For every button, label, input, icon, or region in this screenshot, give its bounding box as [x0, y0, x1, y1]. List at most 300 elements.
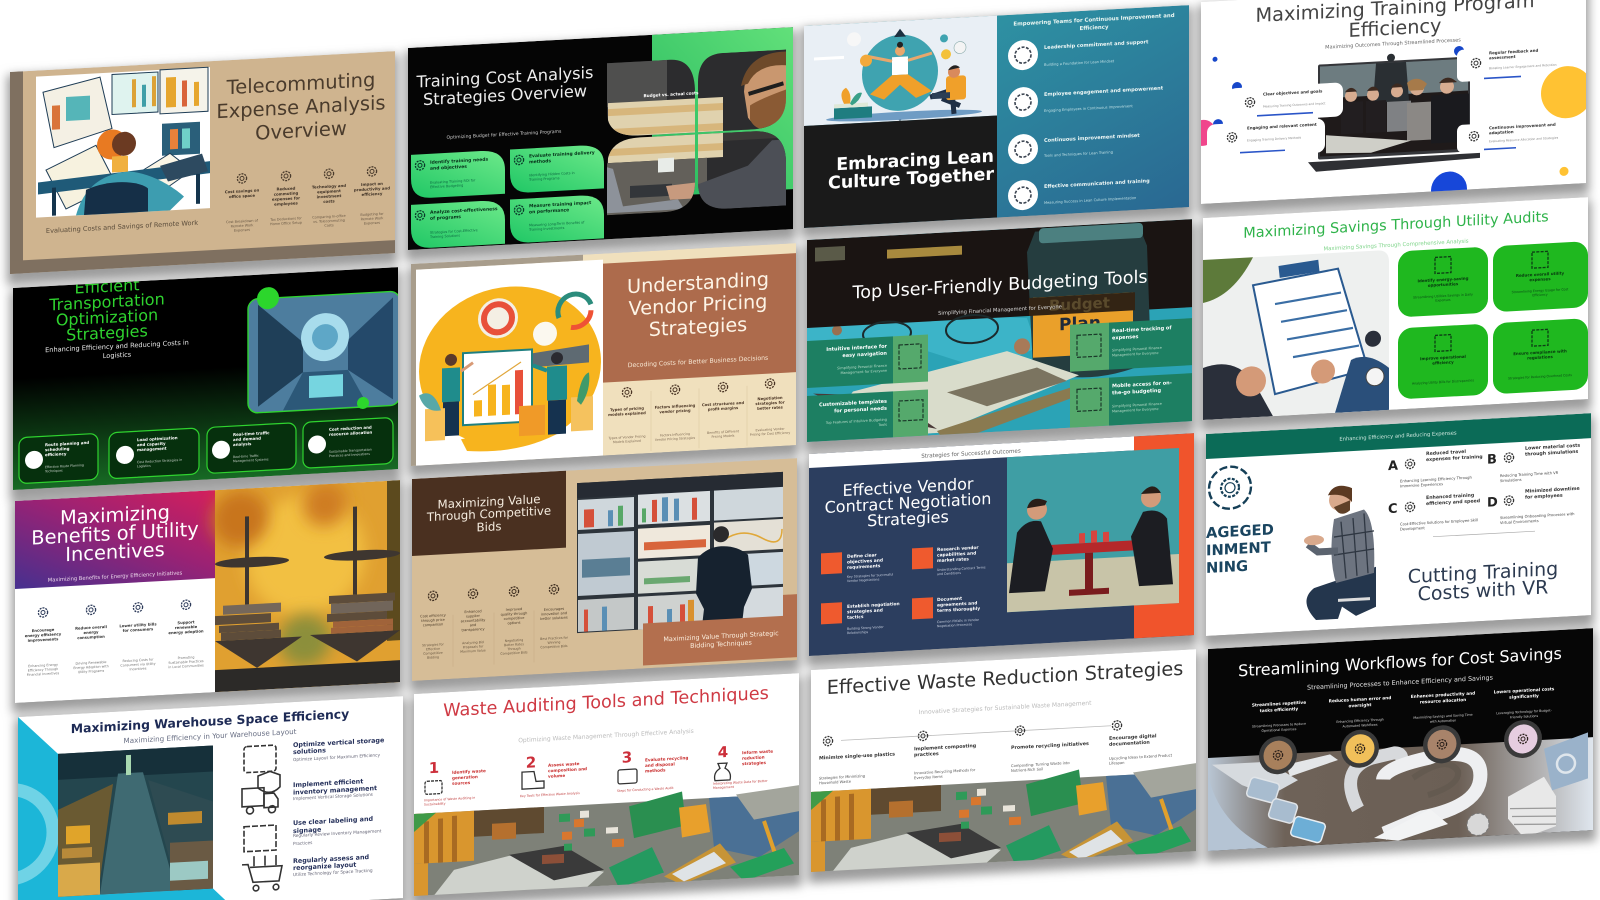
timeline with four strategies: Innovative Recycling Methods for: [914, 768, 976, 775]
slide: Maximizing Warehouse Space Efficiency: Regularly assess and: [293, 853, 370, 865]
four bordered items: [19, 417, 393, 484]
four benefit columns: energy efficiency: [25, 631, 62, 638]
caption bar: [643, 615, 797, 665]
four list rows: Effective communication and training: [1044, 178, 1150, 190]
four numbered steps: and disposal: [645, 761, 675, 768]
four green boxes: Analyze cost-effectiveness: [430, 206, 498, 216]
four benefit columns: consumption: [77, 634, 105, 640]
four green boxes: Identify training needs: [430, 157, 488, 166]
photo: hands with clipboard: [1203, 250, 1389, 420]
four icons and labels: profit margins: [708, 405, 739, 412]
title: Optimization: [56, 305, 158, 330]
slide: Maximizing Warehouse Space Efficiency: Regularly Review Inventory Management: [293, 828, 382, 839]
four green overlay boxes: Intuitive interface for: [826, 344, 888, 353]
four green boxes: [411, 144, 604, 249]
gradient title panel: [15, 490, 215, 589]
four green boxes: Measuring Long-Term Benefits of: [529, 220, 585, 227]
four numbered steps: Assess waste: [548, 761, 580, 768]
icon row and labels: Home Office Setup: [270, 221, 302, 226]
timeline with four strategies: Upcycling Ideas to Extend Product: [1109, 753, 1173, 761]
four numbered steps: Interpreting Waste Data for Better: [713, 779, 768, 786]
slide: Training Cost Analysis Strategies Overview: [408, 27, 793, 250]
four numbered steps: volume: [548, 773, 565, 779]
title: Transportation: [48, 289, 165, 315]
photo: jar, glasses and notepad on table: [807, 219, 1192, 452]
four columns: oversight: [1349, 702, 1371, 709]
icon: gear ring: [1209, 466, 1251, 510]
slide: Efficient Transportation Optimization Strategies: Cost Reduction Strategies in: [137, 458, 182, 464]
four list rows: Tools and Techniques for Lean Training: [1043, 150, 1113, 158]
timeline with four strategies: [819, 718, 1173, 785]
four list rows: Building a Foundation for Lean Mindset: [1044, 59, 1115, 67]
dark brown title panel: [412, 471, 566, 556]
icon row and labels: equipment: [317, 188, 341, 194]
icon row and labels: productivity and: [354, 185, 390, 192]
warehouse image with green frame: [248, 280, 400, 415]
photo: man viewing dashboards: [577, 472, 783, 633]
four cost points A B C D: Reduced travel: [1426, 449, 1466, 457]
four columns: Leveraging Technology for Budget-: [1496, 708, 1552, 715]
timeline with four strategies: Composting: Turning Waste into: [1011, 761, 1070, 768]
four icons and labels: models explained: [608, 410, 646, 417]
slide: Maximizing Warehouse Space Efficiency: signage: [293, 826, 322, 835]
four cost points A B C D: through simulations: [1525, 449, 1579, 458]
slide: Top User-Friendly Budgeting Tools: [807, 219, 1192, 452]
icon row and labels: Cost savings on: [225, 187, 259, 194]
slide: Maximizing Warehouse Space Efficiency: Practices: [293, 840, 313, 847]
four icons and labels: Through: [506, 647, 521, 651]
slide: Maximizing Benefits of Utility Incentives: [15, 478, 400, 703]
caption: Maximizing Value Through Strategic: [663, 629, 779, 643]
illustration: yoga figure with desk worker: [804, 16, 997, 126]
four icons and labels: Benefits of Different: [707, 429, 740, 435]
title: Top User-Friendly Budgeting Tools: [851, 268, 1148, 304]
icon row and labels: Expenses: [234, 228, 250, 233]
four green overlay boxes: Management for Everyone: [1112, 407, 1159, 413]
four benefit columns: Energy Adoption with: [73, 664, 109, 670]
icon row and labels: vs. Telecommuting: [313, 218, 345, 224]
four negotiation tips: objectives and: [847, 557, 883, 565]
four green cards: opportunities: [1428, 281, 1459, 288]
four icons and labels: Winning: [548, 640, 560, 645]
four columns: Maximizing Savings and Saving Time: [1413, 713, 1473, 720]
slide: Maximizing Warehouse Space Efficiency: Implement efficient: [293, 777, 363, 789]
four green cards: [1398, 241, 1588, 399]
four negotiation tips: and Conditions: [937, 571, 961, 576]
four numbered steps: Importance of Waste Auditing in: [424, 796, 475, 802]
header caption: Enhancing Efficiency and Reducing Expenses: [1339, 430, 1457, 443]
four list rows: Continuous improvement mindset: [1044, 133, 1140, 144]
four numbered steps: [424, 741, 773, 807]
cropped heading: INMENT: [1206, 539, 1271, 559]
subtitle: Streamlining Processes to Enhance Efficiency and Savings: [1307, 674, 1494, 692]
four green cards: expenses: [1529, 276, 1551, 282]
four icons and labels: Types of pricing: [610, 405, 644, 412]
four icons and labels: Negotiation: [757, 395, 783, 401]
four benefit columns: [25, 599, 204, 677]
slide: Maximizing Warehouse Space Efficiency: Utilize Technology for Space Tracking: [293, 868, 373, 878]
four icons and labels: Proposals for: [463, 644, 484, 649]
gray edge strips: [411, 255, 583, 466]
callouts: Boosting Learner Engagement and Retention: [1489, 63, 1557, 70]
four green cards: Reduce overall utility: [1516, 270, 1564, 278]
four benefit columns: Sustainable Practices: [168, 659, 204, 665]
four green boxes: Measure training impact: [529, 200, 592, 209]
subtitle: Maximizing Benefits for Energy Efficiency Initiatives: [48, 570, 182, 584]
four green overlay boxes: for personal needs: [834, 406, 887, 415]
four benefit columns: Consumers via Utility: [120, 662, 156, 668]
four icons and labels: Enhanced: [464, 609, 482, 614]
four benefit columns: Driving Renewable: [76, 660, 106, 666]
four green overlay boxes: Real-time tracking of: [1112, 325, 1172, 334]
four icons and labels: Factors Influencing: [660, 432, 690, 438]
timeline with four strategies: Implement composting: [914, 743, 977, 752]
four icons and labels: transparency: [461, 627, 485, 632]
four benefit columns: for consumers: [123, 626, 154, 633]
timeline with four strategies: Nutrient-Rich Soil: [1011, 767, 1043, 773]
green background block: [652, 27, 793, 197]
subtitle: Optimizing Waste Management Through Effective Analysis: [518, 728, 694, 744]
four list rows: Employee engagement and empowerment: [1044, 86, 1164, 98]
title: Maximizing Savings Through Utility Audits: [1243, 209, 1549, 242]
four cost points A B C D: Cost-Effective Solutions for Employee Skill: [1400, 518, 1478, 526]
four cost points A B C D: Minimized downtime: [1525, 486, 1580, 495]
four green overlay boxes: Simplifying Personal Finance: [1112, 402, 1162, 408]
four benefit columns: energy: [84, 629, 99, 635]
four negotiation tips: Establish negotiation: [847, 601, 900, 610]
four icons and labels: better rates: [757, 404, 784, 411]
four benefit columns: Support: [177, 619, 195, 625]
four green overlay boxes: easy navigation: [842, 351, 887, 359]
four numbered steps: Steps for Conducting a Waste Audit: [617, 786, 674, 793]
four negotiation tips: Research vendor: [937, 545, 979, 553]
four icons and labels: quality through: [501, 611, 527, 617]
timeline with four strategies: Household Waste: [819, 780, 852, 785]
four benefit columns: Utility Programs: [78, 669, 104, 674]
callouts: Measuring Training Outcomes and Impact: [1263, 101, 1326, 109]
four negotiation tips: requirements: [847, 563, 881, 571]
four columns: Streamlining Processes to Reduce: [1252, 722, 1306, 729]
timeline with four strategies: documentation: [1109, 740, 1150, 748]
four icons and labels: Evaluating Vendor: [755, 427, 785, 432]
four icons and labels: Better Rates: [504, 642, 524, 647]
photo: jar, glasses and notepad on table: Budget: [1049, 294, 1110, 315]
four icons and labels: vendor pricing: [659, 408, 691, 414]
four icons and labels: options: [508, 621, 521, 625]
title: Embracing Lean: [836, 147, 994, 175]
panel heading: Empowering Teams for Continuous Improvement and: [1013, 13, 1175, 28]
slide: Efficient Transportation Optimization Strategies: resource allocation: [329, 430, 372, 437]
icon row and labels: Impact on: [361, 181, 383, 187]
four columns: resource allocation: [1420, 697, 1466, 706]
title: Maximizing Warehouse Space Efficiency: [71, 706, 349, 736]
four negotiation tips: Vendor Negotiations: [847, 577, 880, 583]
title: Cutting Training: [1408, 558, 1558, 588]
four icons and labels: Effective: [426, 647, 440, 651]
four numbered steps: 2: [526, 753, 536, 772]
four list rows: [1008, 33, 1164, 211]
four columns: Enhancing Efficiency Through: [1336, 717, 1384, 724]
slide: Maximizing Warehouse Space Efficiency: reorganize layout: [293, 861, 356, 872]
four icons and labels: innovation and: [541, 611, 567, 617]
four columns: Operational Expenses: [1262, 727, 1297, 733]
four icons and labels: Strategies for: [422, 642, 445, 647]
four icons and labels: Pricing for Cost Efficiency: [750, 431, 790, 437]
slide: Efficient Transportation Optimization Strategies: Real-time Traffic: [233, 454, 259, 459]
slide: Maximizing Warehouse Space Efficiency: inventory management: [293, 784, 377, 797]
orange band: [1134, 433, 1194, 638]
subtitle: Decoding Costs for Better Business Decisions: [628, 355, 768, 369]
four icons and labels: Analyzing Bid: [462, 640, 484, 645]
title: Training Cost Analysis: [416, 63, 593, 92]
icon row and labels: Budgeting for: [360, 212, 384, 217]
title: Bids: [477, 519, 501, 535]
slide: Maximizing Training Program Efficiency: [1190, 0, 1593, 222]
four list rows: Leadership commitment and support: [1044, 39, 1149, 51]
four green boxes: Effective Budgeting: [430, 183, 463, 189]
slide: Maximizing Warehouse Space Efficiency: [0, 696, 403, 900]
title: Effective Vendor: [842, 474, 974, 500]
top caption: Strategies for Successful Outcomes: [921, 449, 1021, 460]
title: Understanding: [627, 268, 769, 298]
icon row and labels: efficiency: [362, 191, 383, 197]
subtitle: Enhancing Efficiency and Reducing Costs in: [45, 338, 189, 354]
four columns: Friendly Solutions: [1510, 714, 1538, 719]
slide: Efficient Transportation Optimization Strategies: Techniques: [44, 468, 63, 474]
four benefit columns: improvements: [28, 636, 59, 643]
four icons and labels: Maximum Value: [460, 648, 486, 654]
four icon rows: [242, 745, 282, 892]
four negotiation tips: Define clear: [847, 552, 878, 560]
four negotiation tips: Common Pitfalls in Vendor: [937, 618, 980, 624]
four icons and labels: accountability: [461, 618, 485, 623]
icon row and labels: Expenses: [364, 221, 380, 226]
subtitle: Maximizing Efficiency in Your Warehouse Layout: [124, 727, 297, 745]
four icons and labels: competitive: [504, 616, 524, 621]
slide: Efficient Transportation Optimization Strategies: Load optimization: [137, 435, 178, 442]
title: Through Competitive: [426, 503, 551, 524]
four green cards: Streamlining Utilities Savings in Daily: [1413, 292, 1473, 300]
slide: Streamlining Workflows for Cost Savings: [1208, 628, 1593, 855]
four cost points A B C D: Enhancing Learning Efficiency Through: [1400, 476, 1473, 483]
four green boxes: Identifying Hidden Costs in: [529, 171, 575, 177]
four cost points A B C D: expenses for training: [1426, 454, 1483, 463]
icon row and labels: Remote Work: [231, 223, 253, 228]
four icons and labels: supplier: [466, 614, 481, 619]
four green boxes: Evaluate training delivery: [529, 150, 595, 159]
slide: Effective Waste Reduction Strategies: [811, 649, 1196, 877]
photo: coins on balance scale: [212, 478, 400, 692]
title: Costs with VR: [1418, 576, 1548, 606]
four numbered steps: 1: [429, 759, 439, 777]
timeline with four strategies: Strategies for Minimizing: [819, 774, 865, 781]
four negotiation tips: Negotiation Processes: [937, 622, 973, 628]
timeline with four strategies: practices: [914, 751, 939, 758]
photo in four leaf shapes: man at laptop: [607, 47, 788, 217]
warehouse photo: [58, 745, 213, 897]
title: Strategies: [66, 321, 148, 345]
four icons and labels: strategies for: [755, 400, 785, 406]
title: Waste Auditing Tools and Techniques: [443, 684, 769, 721]
cropped heading: AGEGED: [1206, 521, 1274, 542]
four negotiation tips: Understanding Contract Terms: [937, 565, 986, 572]
title: Benefits of Utility: [31, 518, 199, 550]
photo: seated man gesturing: [1304, 484, 1376, 621]
brown title panel: [603, 253, 796, 383]
slide: Maximizing Value Through Competitive Bids: [412, 458, 797, 681]
four green cards: Strategies for Reducing Overhead Costs: [1508, 373, 1572, 380]
four cost points A B C D: Development: [1400, 526, 1425, 531]
four list rows: Measuring Success in Lean Culture Implementation: [1044, 196, 1136, 205]
four green overlay boxes: Top Features of Intuitive Budgeting: [825, 418, 887, 425]
four icons and labels: Types of Vendor Pricing: [607, 434, 646, 440]
four cost points A B C D: efficiency and speed: [1426, 498, 1480, 507]
four green boxes: Evaluating Training ROI for: [430, 178, 476, 185]
four green boxes: Training Investments: [528, 226, 565, 232]
four green overlay boxes: Simplifying Personal Finance: [1112, 346, 1162, 352]
four benefit columns: Reduce overall: [75, 624, 107, 631]
four numbered steps: generation: [452, 774, 478, 780]
four green cards: Analyzing Utility Bills for Discrepancies: [1412, 378, 1474, 386]
four icons and labels: Cost efficiency: [420, 613, 446, 619]
slide: Maximizing Savings Through Utility Audits: [1203, 197, 1588, 420]
four benefit columns: Lower utility bills: [119, 621, 157, 628]
photo: two negotiators at red table: [1007, 448, 1179, 612]
metallic photo with dollar sign: [1208, 732, 1593, 855]
slide: Telecommuting Expense Analysis Overview: [10, 51, 395, 274]
callouts: Engaging Training Delivery Methods: [1247, 136, 1301, 143]
slide: Efficient Transportation Optimization Strategies: Logistics: [137, 464, 151, 468]
four green overlay boxes: [807, 318, 1192, 442]
four green boxes: Strategies for Cost-Effective: [430, 228, 478, 235]
four numbered steps: composition and: [548, 766, 587, 773]
four green overlay boxes: Customizable templates: [819, 399, 887, 408]
green header band: [1206, 413, 1591, 459]
title: Telecommuting: [226, 68, 375, 99]
four benefit columns: energy adoption: [168, 628, 204, 635]
subtitle: Maximizing Savings Through Comprehensive Analysis: [1323, 239, 1469, 252]
four icons and labels: Pricing Models: [712, 434, 735, 439]
slide: Efficient Transportation Optimization Strategies: [13, 261, 400, 490]
title: Efficient: [74, 275, 140, 298]
four benefit columns: Incentives: [130, 666, 147, 671]
four green cards: Identify energy-saving: [1417, 276, 1469, 283]
four cost points A B C D: A: [1388, 459, 1398, 474]
title: Maximizing Value: [438, 492, 540, 512]
timeline with four strategies: Encourage digital: [1109, 733, 1157, 742]
four negotiation tips: capabilities and: [937, 550, 976, 559]
slide: Efficient Transportation Optimization Strategies: efficiency: [45, 451, 67, 457]
timeline with four strategies: Promote recycling initiatives: [1011, 741, 1089, 751]
four icons and labels: Vendor Pricing Strategies: [655, 436, 695, 442]
timeline with four strategies: Lifespan: [1109, 761, 1125, 766]
subtitle: Simplifying Financial Management for Everyone: [938, 304, 1062, 317]
four numbered steps: methods: [645, 767, 666, 773]
four green overlay boxes: the-go budgeting: [1112, 388, 1161, 396]
four green boxes: on performance: [529, 207, 569, 215]
callouts: adaptation: [1489, 129, 1514, 135]
slide: Maximizing Warehouse Space Efficiency: Optimize vertical storage: [293, 736, 385, 749]
four numbered steps: Key Tools for Effective Waste Analysis: [520, 791, 580, 798]
four cost points A B C D: for employees: [1525, 493, 1563, 501]
four benefit columns: Financial Incentives: [27, 671, 59, 677]
slide: Efficient Transportation Optimization Strategies: Cost reduction and: [329, 425, 372, 432]
callouts: Continuous improvement and: [1489, 122, 1556, 130]
four cost points A B C D: Virtual Environments: [1500, 519, 1539, 525]
laptop with meeting photo: [1308, 49, 1480, 172]
four benefit columns: Enhancing Energy: [28, 663, 58, 668]
four negotiation tips: Building Strong Vendor: [847, 625, 884, 631]
four columns: Reduces human error and: [1329, 695, 1391, 704]
four numbered steps: 3: [622, 748, 632, 767]
four numbered steps: Evaluate recycling: [645, 755, 688, 762]
four green overlay boxes: Management for Everyone: [840, 369, 887, 375]
four icons and labels: Competitive Bids: [500, 650, 528, 656]
four icons and labels: better solutions: [540, 616, 568, 621]
callouts: Engaging and relevant content: [1247, 122, 1317, 131]
four green overlay boxes: Management for Everyone: [1112, 351, 1159, 357]
four green boxes: Training Solutions: [429, 234, 460, 239]
four green cards: regulations: [1527, 354, 1553, 360]
four negotiation tips: Document: [937, 596, 962, 603]
four cost points A B C D: Simulations: [1500, 478, 1522, 483]
four negotiation tips: tactics: [847, 614, 864, 621]
four cost points A B C D: Reducing Training Time with VR: [1500, 471, 1559, 478]
four icons and labels: Factors influencing: [655, 403, 696, 410]
four columns: [1252, 686, 1555, 733]
four green cards: Ensure compliance with: [1513, 348, 1567, 356]
slide: Efficient Transportation Optimization Strategies: and capacity: [137, 441, 166, 447]
title: Strategies: [867, 507, 949, 530]
four numbered steps: Sustainability: [424, 801, 446, 807]
photo: jar, glasses and notepad on table: Plan: [1059, 313, 1101, 335]
icon row and labels: Reduced: [277, 186, 296, 192]
timeline with four strategies: Minimize single-use plastics: [819, 751, 895, 762]
slide: Effective Vendor Contract Negotiation Strategies: [809, 433, 1194, 656]
four negotiation tips: agreements and: [937, 600, 977, 609]
four green cards: Streamlining Energy Usage for Cost: [1512, 287, 1569, 294]
title: Culture Together: [828, 165, 994, 194]
four green boxes: of programs: [430, 214, 461, 222]
four icons and labels: [607, 378, 790, 453]
icon row and labels: expenses for: [272, 195, 300, 202]
table caption: Budget vs. actual costs: [643, 90, 699, 98]
four green cards: Improve operational: [1420, 354, 1467, 361]
subtitle: Optimizing Budget for Effective Training Programs: [447, 129, 562, 141]
subtitle: Logistics: [103, 351, 132, 360]
black title panel: [804, 116, 997, 228]
caption: Evaluating Costs and Savings of Remote Work: [46, 219, 198, 235]
title: Strategies Overview: [423, 81, 587, 109]
decorative blobs: [1190, 36, 1593, 222]
four negotiation tips: market rates: [937, 556, 969, 564]
four icons and labels: Best Practices for: [540, 636, 569, 641]
four green boxes: and objectives: [430, 164, 467, 172]
four cost points A B C D: Immersive Experiences: [1400, 482, 1443, 488]
four list rows: Engaging Employees in Continuous Improvement: [1044, 104, 1133, 113]
four numbered steps: strategies: [742, 760, 766, 766]
image: recycling facility with trucks: [414, 785, 799, 899]
four green cards: Efficiency: [1532, 293, 1548, 297]
four negotiation tips: strategies and: [847, 608, 883, 615]
four cost points A B C D: [1388, 443, 1580, 532]
slide: Efficient Transportation Optimization Strategies: and demand: [233, 436, 261, 442]
four benefit columns: in Local Communities: [168, 663, 204, 669]
icon row and labels: Remote Work: [361, 216, 383, 221]
four green overlay boxes: Simplifying Personal Finance: [837, 364, 887, 370]
timeline with four strategies: Everyday Items: [914, 775, 943, 780]
slide: Efficient Transportation Optimization Strategies: Effective Route Planning: [45, 463, 84, 469]
